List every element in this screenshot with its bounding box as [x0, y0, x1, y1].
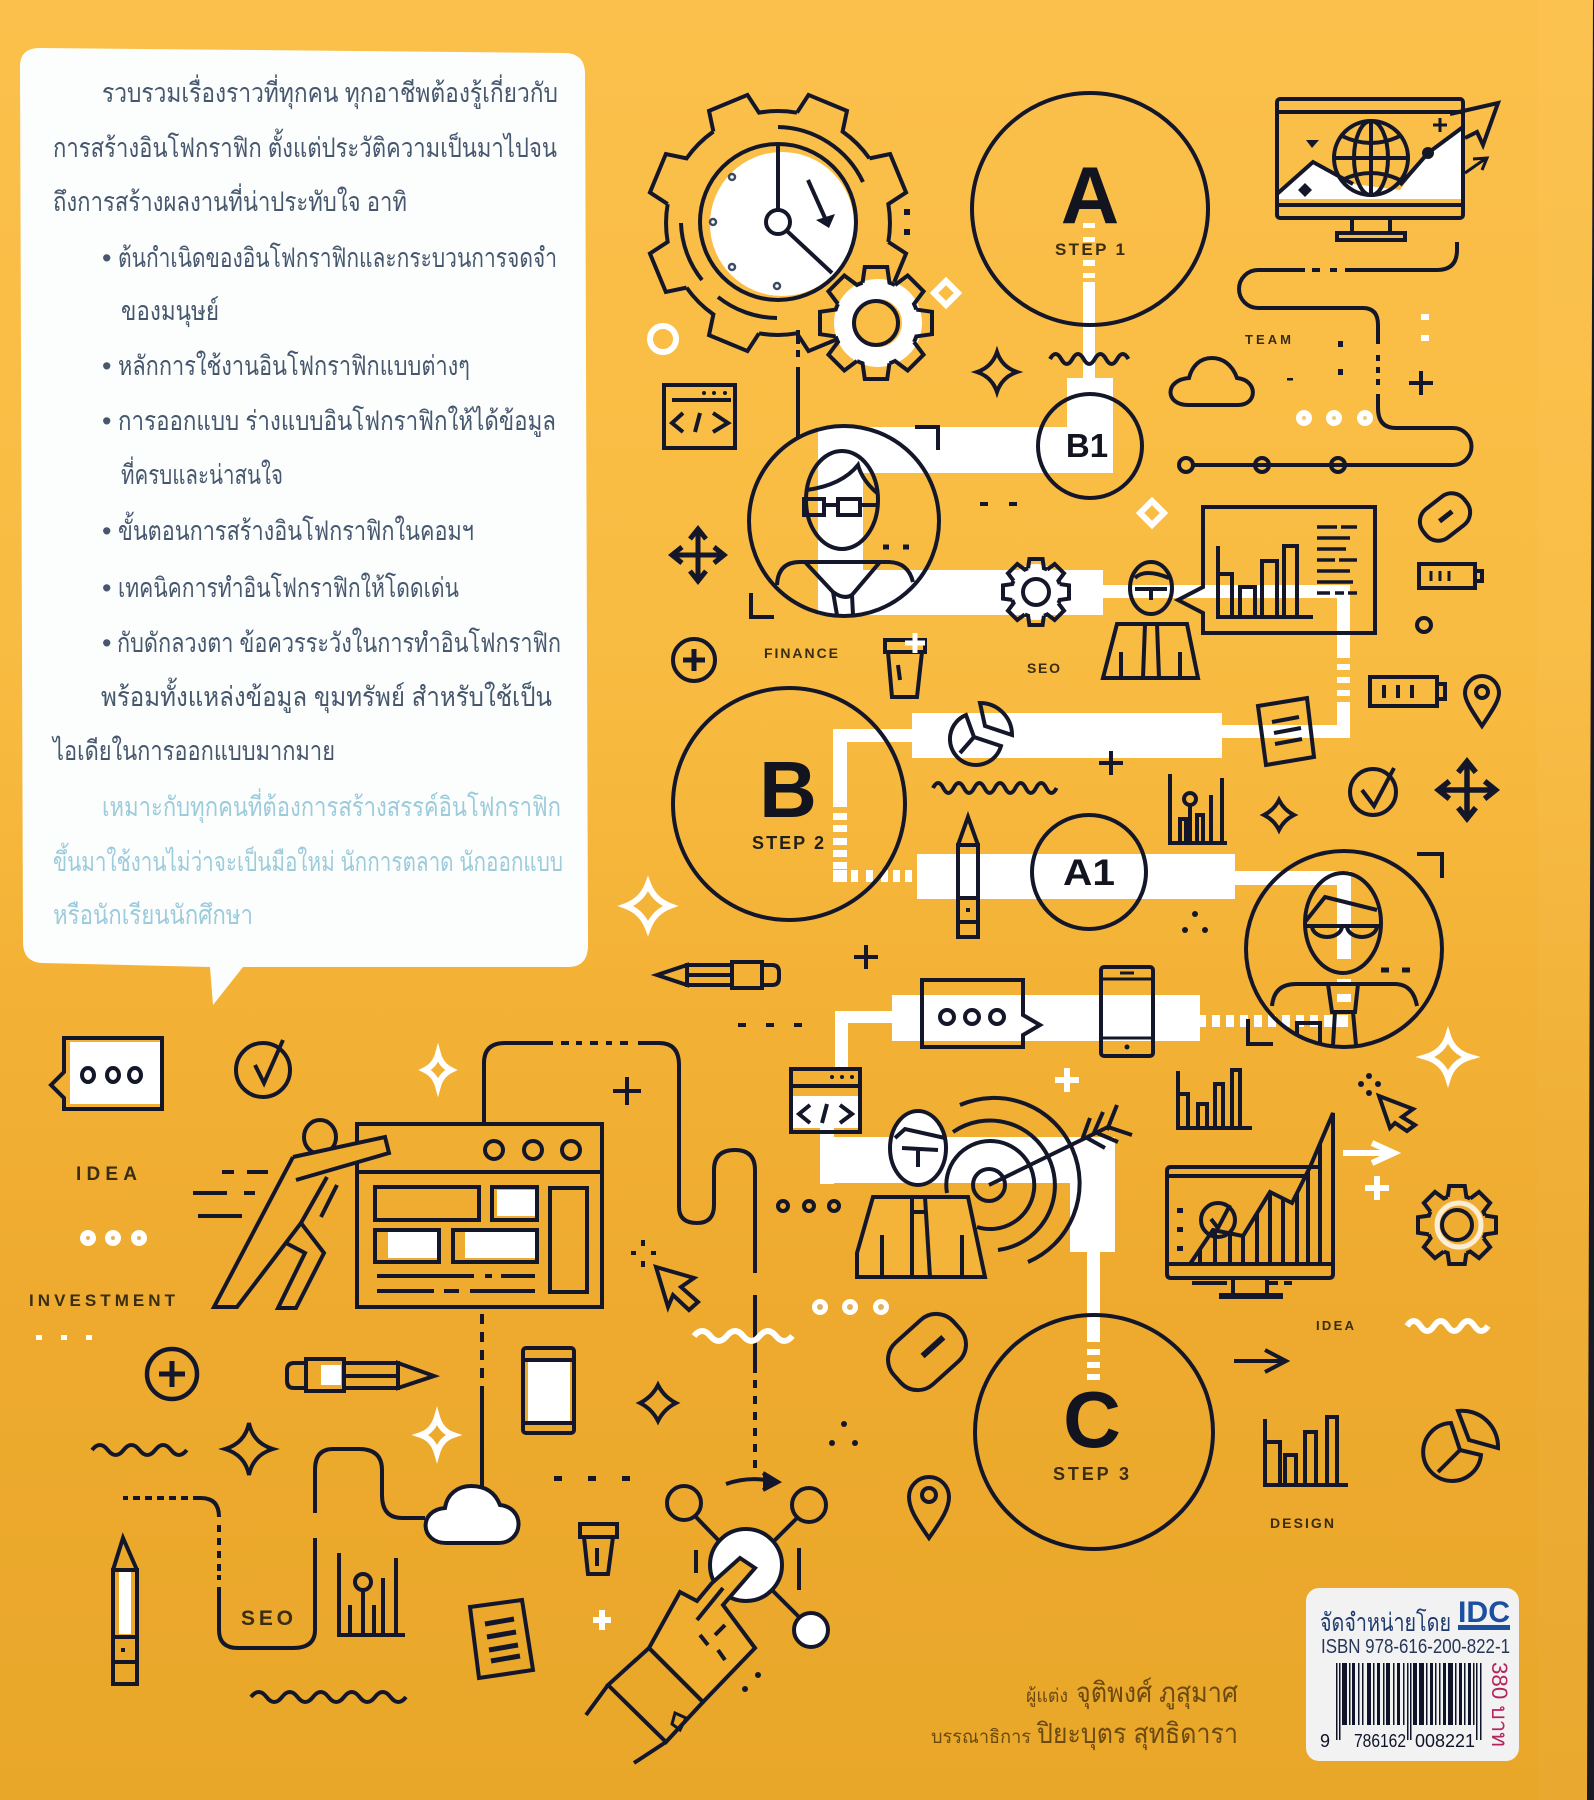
circle: C step 3: C	[1063, 1375, 1121, 1464]
dots triangle	[1182, 911, 1208, 933]
plus	[1409, 371, 1433, 395]
decorative white ring	[650, 326, 676, 352]
icon: cloud with white fill	[426, 1486, 519, 1543]
icon: cursor left	[631, 1240, 698, 1310]
intro paragraph: การสร้างอินโฟกราฟิก ตั้งแต่ประวัติความเป็นมาไปจน	[53, 128, 557, 163]
dark diamond	[1264, 800, 1294, 830]
bullet list: เทคนิคการทำอินโฟกราฟิกให้โดดเด่น	[118, 572, 459, 603]
small dots near team	[1287, 341, 1343, 380]
clock tick dots	[710, 174, 780, 289]
corner brackets	[751, 427, 938, 617]
icon: dark arrow	[1234, 1350, 1286, 1372]
right dark page edge	[1587, 0, 1594, 1800]
icon: gear lower right	[1418, 1186, 1496, 1264]
icon: code window on band	[791, 1069, 860, 1132]
white diamond left	[425, 1054, 451, 1086]
bullet list: หลักการใช้งานอินโฟกราฟิกแบบต่างๆ	[118, 350, 470, 381]
barcode digits: 9	[1320, 1731, 1330, 1751]
icon: hand pressing network hub	[586, 1486, 828, 1763]
price: 380 บาท	[1487, 1662, 1512, 1747]
vertical dashed cable	[480, 1314, 484, 1487]
icon: monitor with globe	[1277, 99, 1498, 240]
bullet list: ที่ครบและน่าสนใจ	[121, 456, 283, 490]
TEAM label: TEAM	[1245, 332, 1291, 347]
icon: vertical pencil	[958, 817, 978, 937]
author credits: ผู้แต่ง	[1026, 1686, 1068, 1707]
bubble shape	[20, 48, 588, 1005]
white plus	[1365, 1176, 1389, 1200]
ring dots trio	[778, 1201, 839, 1211]
icon: pen left	[287, 1359, 434, 1391]
dots beside gear	[904, 209, 910, 235]
resources paragraph	[51, 677, 552, 766]
white wave right	[1407, 1321, 1488, 1331]
dots triangle lower	[829, 1421, 858, 1446]
icon: pencil lower left	[113, 1538, 137, 1684]
dark star left	[225, 1423, 273, 1475]
bullet list: •	[102, 628, 111, 658]
icon: code window	[664, 385, 735, 448]
SEO label: SEO	[1027, 660, 1060, 676]
large gear outline	[603, 48, 953, 398]
panel: white speech bubble with description	[20, 48, 588, 1005]
author credits: บรรณาธิการ	[931, 1727, 1031, 1748]
icon: browser window	[357, 1124, 602, 1307]
icon: coffee cup	[885, 633, 925, 697]
icon: battery small	[1419, 564, 1482, 588]
icon: chart speech box	[1178, 507, 1375, 633]
icon: move arrows 2	[1438, 761, 1496, 819]
icon: plus circle left	[147, 1349, 197, 1399]
circle: B1: B1	[1066, 427, 1108, 464]
icon: pie chart on band	[950, 703, 1012, 765]
bullet list: ของมนุษย์	[121, 295, 219, 328]
SEO label left: SEO	[241, 1607, 293, 1630]
icon: map pin	[1465, 676, 1499, 726]
dark star	[977, 352, 1017, 392]
icon: battery large	[1370, 677, 1445, 706]
FINANCE label: FINANCE	[764, 645, 838, 661]
white diamond	[934, 281, 958, 305]
icon: phone on band	[1101, 967, 1153, 1056]
icon: document lower	[470, 1600, 533, 1678]
ISBN number: ISBN 978-616-200-822-1	[1321, 1636, 1510, 1658]
wave left	[92, 1445, 187, 1455]
plus right of wave	[1099, 751, 1123, 775]
circle: B1	[1038, 394, 1142, 498]
head and body	[857, 1111, 985, 1277]
spine crease band	[1537, 0, 1594, 1800]
icon: pie chart lower right	[1423, 1411, 1498, 1481]
lower winding path	[123, 1449, 425, 1648]
barcode digits: 008221	[1415, 1731, 1475, 1751]
icon: plus circle	[673, 639, 715, 681]
resources paragraph: ไอเดียในการออกแบบมากมาย	[51, 735, 335, 766]
white dashes	[1421, 314, 1429, 341]
icon: cup lower	[580, 1524, 617, 1574]
audience paragraph	[53, 788, 563, 930]
bullet list: ต้นกำเนิดของอินโฟกราฟิกและกระบวนการจดจำ	[118, 243, 557, 273]
author credits	[931, 1677, 1238, 1751]
icon: gear with clock	[603, 48, 953, 398]
white dots trio left	[80, 1230, 147, 1246]
icon: person 1 with glasses in circle	[749, 426, 939, 617]
icon: man pushing window	[193, 1120, 389, 1308]
barcode digits: 786162	[1354, 1731, 1406, 1751]
dashes lower	[554, 1476, 630, 1481]
IDC logo: IDC	[1458, 1596, 1510, 1629]
wave under A	[1050, 354, 1128, 364]
small ring	[1417, 618, 1431, 632]
sticker: ISBN barcode label	[1306, 1588, 1519, 1761]
INVESTMENT label: INVESTMENT	[29, 1291, 176, 1310]
globe	[1334, 121, 1408, 195]
icon: phone lower	[523, 1348, 574, 1433]
white star right	[1426, 1036, 1470, 1078]
white diamond 2	[1140, 501, 1164, 525]
audience paragraph: เหมาะกับทุกคนที่ต้องการสร้างสรรค์อินโฟกราฟิก	[102, 788, 561, 824]
icon: speech box with dots	[922, 980, 1040, 1047]
audience paragraph: หรือนักเรียนนักศึกษา	[53, 900, 253, 930]
white star lower	[421, 1417, 453, 1453]
circle: A step 1: A	[1061, 151, 1119, 241]
clock hands	[778, 145, 832, 273]
icon: curved arrow to hub	[726, 1473, 778, 1490]
white plus lower	[593, 1610, 611, 1630]
bullet list: ขั้นตอนการสร้างอินโฟกราฟิกในคอมฯ	[118, 511, 474, 546]
white star left	[626, 884, 670, 928]
dark star diamond	[640, 1385, 676, 1421]
barcode digits	[1320, 1731, 1475, 1751]
dashes	[980, 502, 1017, 506]
circle: B step 2: STEP 2	[752, 833, 824, 853]
bullet list	[102, 243, 561, 658]
icon: move arrows	[672, 529, 724, 581]
icon: small gear	[820, 267, 932, 379]
audience paragraph: ขึ้นมาใช้งานไม่ว่าจะเป็นมือใหม่ นักการตลาด นักออกแบบ	[53, 842, 563, 877]
hand	[649, 1558, 755, 1702]
icon: horizontal pen	[657, 962, 779, 988]
icon: check circle	[1350, 768, 1396, 815]
clock arrow	[808, 180, 825, 218]
circle: A step 1: STEP 1	[1055, 240, 1125, 259]
icon: check circle left	[236, 1040, 290, 1097]
icon: bar chart	[1178, 1070, 1252, 1128]
target rings and arrow	[946, 1098, 1132, 1262]
icon: cursor right	[1358, 1073, 1415, 1131]
icon: mouse lower	[879, 1304, 975, 1400]
corner brackets 2	[1248, 854, 1442, 1044]
icon: document top	[1258, 698, 1314, 765]
bullet list: •	[102, 406, 111, 436]
hub and nodes	[696, 1517, 800, 1618]
icon: person 2	[1103, 562, 1198, 678]
IDEA label left: IDEA	[76, 1164, 137, 1185]
winding path with dots	[1179, 242, 1472, 472]
icon: left speech box	[51, 1038, 162, 1109]
growth arrows	[1450, 103, 1498, 145]
circle: A1	[1032, 815, 1146, 929]
circle: B step 2: B	[759, 745, 817, 834]
intro paragraph: ถึงการสร้างผลงานที่น่าประทับใจ อาทิ	[53, 183, 407, 217]
intro paragraph: รวบรวมเรื่องราวที่ทุกคน ทุกอาชีพต้องรู้เกี่ยวกับ	[102, 74, 558, 110]
wave bottom	[251, 1692, 406, 1702]
icon: mouse top right	[1413, 487, 1477, 547]
white dashes left	[36, 1335, 92, 1340]
icon: cloud	[1170, 358, 1253, 405]
intro paragraph	[53, 74, 558, 217]
white plus center	[1055, 1068, 1079, 1092]
white arrow	[1343, 1143, 1394, 1163]
white wave center	[694, 1331, 792, 1341]
circle: B step 2	[673, 688, 905, 920]
circle: C step 3	[975, 1315, 1213, 1549]
distributor text: จัดจำหน่ายโดย	[1320, 1608, 1451, 1637]
icon: person 3 with sunglasses in circle	[1246, 851, 1442, 1047]
DESIGN label: DESIGN	[1270, 1515, 1334, 1531]
top winding path	[484, 1043, 755, 1468]
IDEA label right: IDEA	[1316, 1318, 1355, 1333]
icon: person 4 with target	[857, 1098, 1132, 1277]
bullet list: •	[102, 573, 111, 603]
bullet list: กับดักลวงตา ข้อควรระวังในการทำอินโฟกราฟิก	[117, 627, 561, 658]
circle: A step 1	[972, 93, 1208, 325]
white connector bands	[793, 223, 1351, 1380]
icon: bar chart lower right	[1265, 1417, 1348, 1485]
author credits: จุติพงศ์ ภูสุมาศ	[1076, 1677, 1238, 1710]
bullet list: •	[102, 351, 111, 381]
icon: gear on band	[1003, 559, 1069, 625]
icon: monitor with growth chart	[1167, 1110, 1333, 1299]
white dots trio	[1296, 410, 1373, 426]
bullet list: การออกแบบ ร่างแบบอินโฟกราฟิกให้ได้ข้อมูล	[118, 405, 556, 437]
gear inner arcs	[681, 127, 863, 318]
bullet list: •	[102, 243, 111, 273]
circle: A1: A1	[1063, 852, 1115, 893]
author credits: ปิยะบุตร สุทธิดารา	[1036, 1718, 1238, 1751]
dashes trio	[738, 1023, 802, 1027]
barcode	[1336, 1663, 1482, 1740]
icon: map pin lower	[909, 1477, 949, 1538]
wave below pie	[933, 783, 1057, 793]
plus below B	[854, 945, 878, 969]
icon: lollipop chart lower	[339, 1553, 405, 1635]
plus top	[613, 1077, 641, 1105]
circle: C step 3: STEP 3	[1053, 1464, 1129, 1484]
connector from gear to person	[796, 330, 800, 437]
white dots trio center	[812, 1299, 889, 1315]
icon: lollipop bar chart	[1170, 774, 1227, 843]
clock face	[710, 152, 854, 296]
bullet list: •	[102, 516, 111, 546]
resources paragraph: พร้อมทั้งแหล่งข้อมูล ขุมทรัพย์ สำหรับใช้เป็น	[101, 677, 552, 714]
